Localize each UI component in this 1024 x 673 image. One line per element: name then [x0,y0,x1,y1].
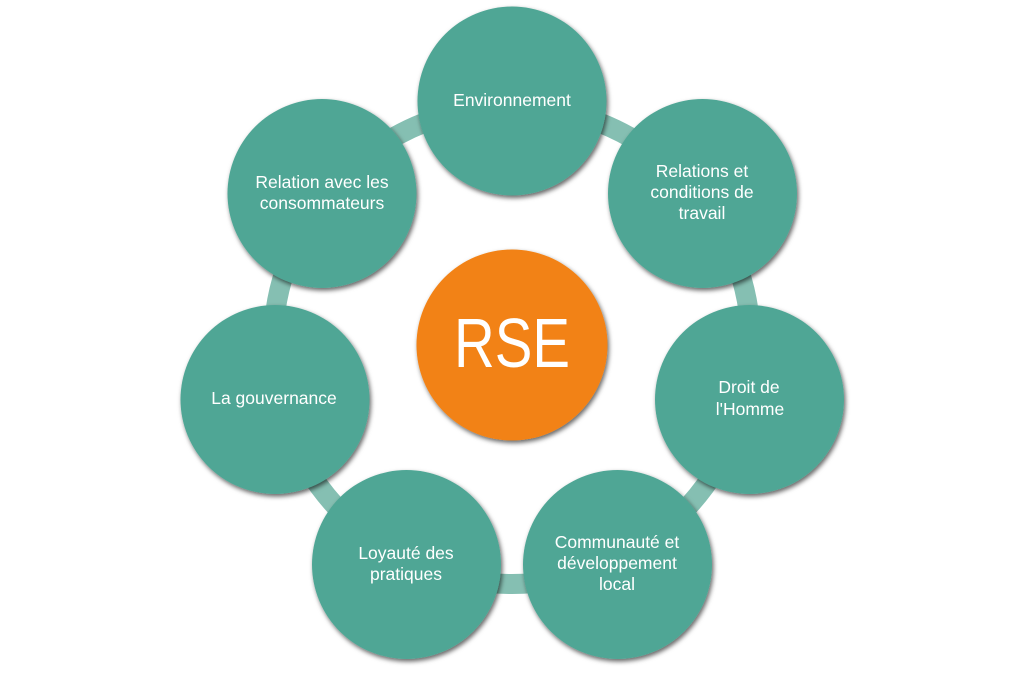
node: Communauté et développement local [523,470,712,659]
node: Communauté et développement local: Communauté et [555,532,679,552]
centre circle: RSE [416,250,608,440]
connecting ring [273,106,751,584]
node: Relations et conditions de travail: travail [679,203,725,223]
node: Loyauté des pratiques: Loyauté des [358,543,454,563]
node: La gouvernance [180,305,370,494]
node: La gouvernance: La gouvernance [211,388,337,408]
node: Communauté et développement local: développement [557,553,677,573]
node: Relations et conditions de travail: conditions de [650,182,754,202]
node: Environnement [418,6,606,196]
node: Droit de l'Homme: Droit de [718,377,780,397]
centre circle: RSE: RSE [454,304,570,382]
node: Relations et conditions de travail: Relations et [656,161,748,181]
node: Loyauté des pratiques [312,470,501,659]
node: Relation avec les consommateurs: consommateurs [260,193,384,213]
node: Droit de l'Homme: l'Homme [716,399,784,419]
node: Droit de l'Homme [655,305,844,494]
node: Relation avec les consommateurs: Relation avec les [255,172,389,192]
node: Loyauté des pratiques: pratiques [370,564,442,584]
node: Communauté et développement local: local [599,574,635,594]
node: Environnement: Environnement [453,90,571,110]
node: Relations et conditions de travail [608,99,797,288]
node: Relation avec les consommateurs [228,99,416,288]
